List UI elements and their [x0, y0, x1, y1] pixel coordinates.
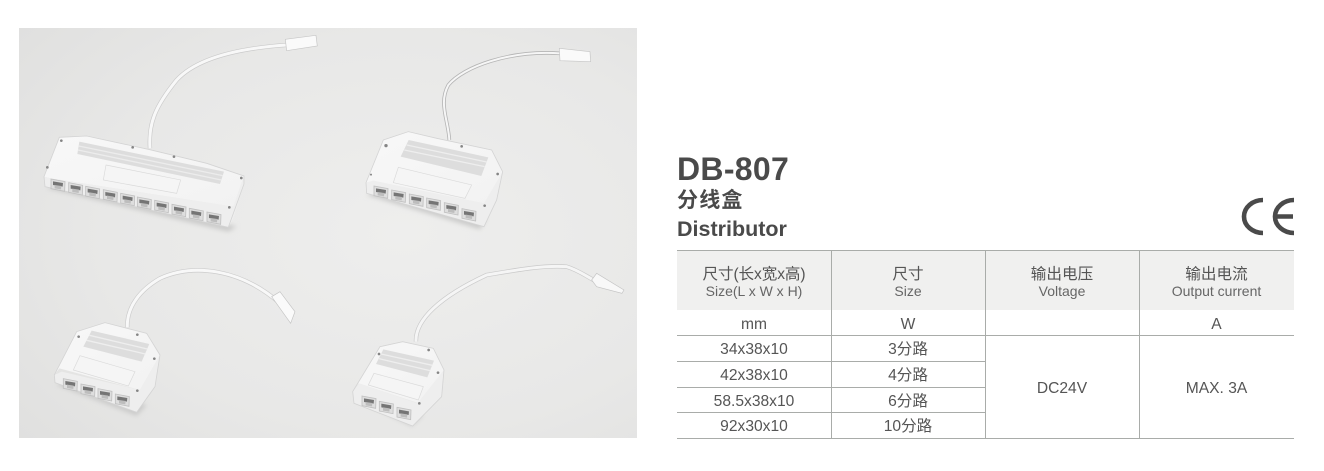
panel: product photo — [19, 28, 637, 438]
product: 3-way distributor — [353, 266, 624, 426]
header: size LxWxH — [702, 266, 806, 299]
header: size: 尺寸 — [892, 266, 924, 283]
table: specifications — [677, 250, 1294, 439]
header: output current — [1172, 266, 1262, 299]
row: 4-way: 42x38x10 — [720, 367, 788, 384]
header: voltage — [1031, 266, 1093, 299]
table header background — [677, 251, 1294, 310]
icon: CE mark — [1242, 198, 1294, 236]
product: 6-way distributor — [366, 48, 591, 229]
header: output current: Output current — [1172, 283, 1261, 299]
table: specifications: A — [1211, 316, 1222, 333]
header: voltage: 输出电压 — [1031, 266, 1093, 283]
header: size: Size — [894, 283, 922, 299]
header: voltage: Voltage — [1039, 283, 1085, 299]
row: 10-way: 92x30x10 — [720, 418, 788, 435]
title: model number: DB-807 — [677, 151, 789, 187]
table: specifications: 4分路 — [888, 367, 928, 384]
row: 3-way: 34x38x10 — [720, 341, 788, 358]
heading: english name: Distributor — [677, 217, 787, 241]
merged cell: voltage: DC24V — [1037, 380, 1087, 397]
heading: chinese name: 分线盒 — [677, 189, 744, 212]
product: 4-way distributor — [54, 270, 295, 416]
table: specifications: 3分路 — [888, 341, 928, 358]
row: 6-way: 58.5x38x10 — [714, 393, 794, 410]
merged cell: current: MAX. 3A — [1186, 380, 1247, 397]
header: size — [892, 266, 924, 299]
table: specifications: 6分路 — [888, 393, 928, 410]
units row: mm — [741, 316, 767, 333]
header: size LxWxH: Size(L x W x H) — [706, 283, 802, 299]
product: 10-way distributor — [44, 35, 317, 232]
table: specifications: W — [901, 316, 915, 333]
header: output current: 输出电流 — [1185, 266, 1248, 283]
header: size LxWxH: 尺寸(长x宽x高) — [702, 266, 806, 283]
table: specifications: 10分路 — [884, 418, 932, 435]
